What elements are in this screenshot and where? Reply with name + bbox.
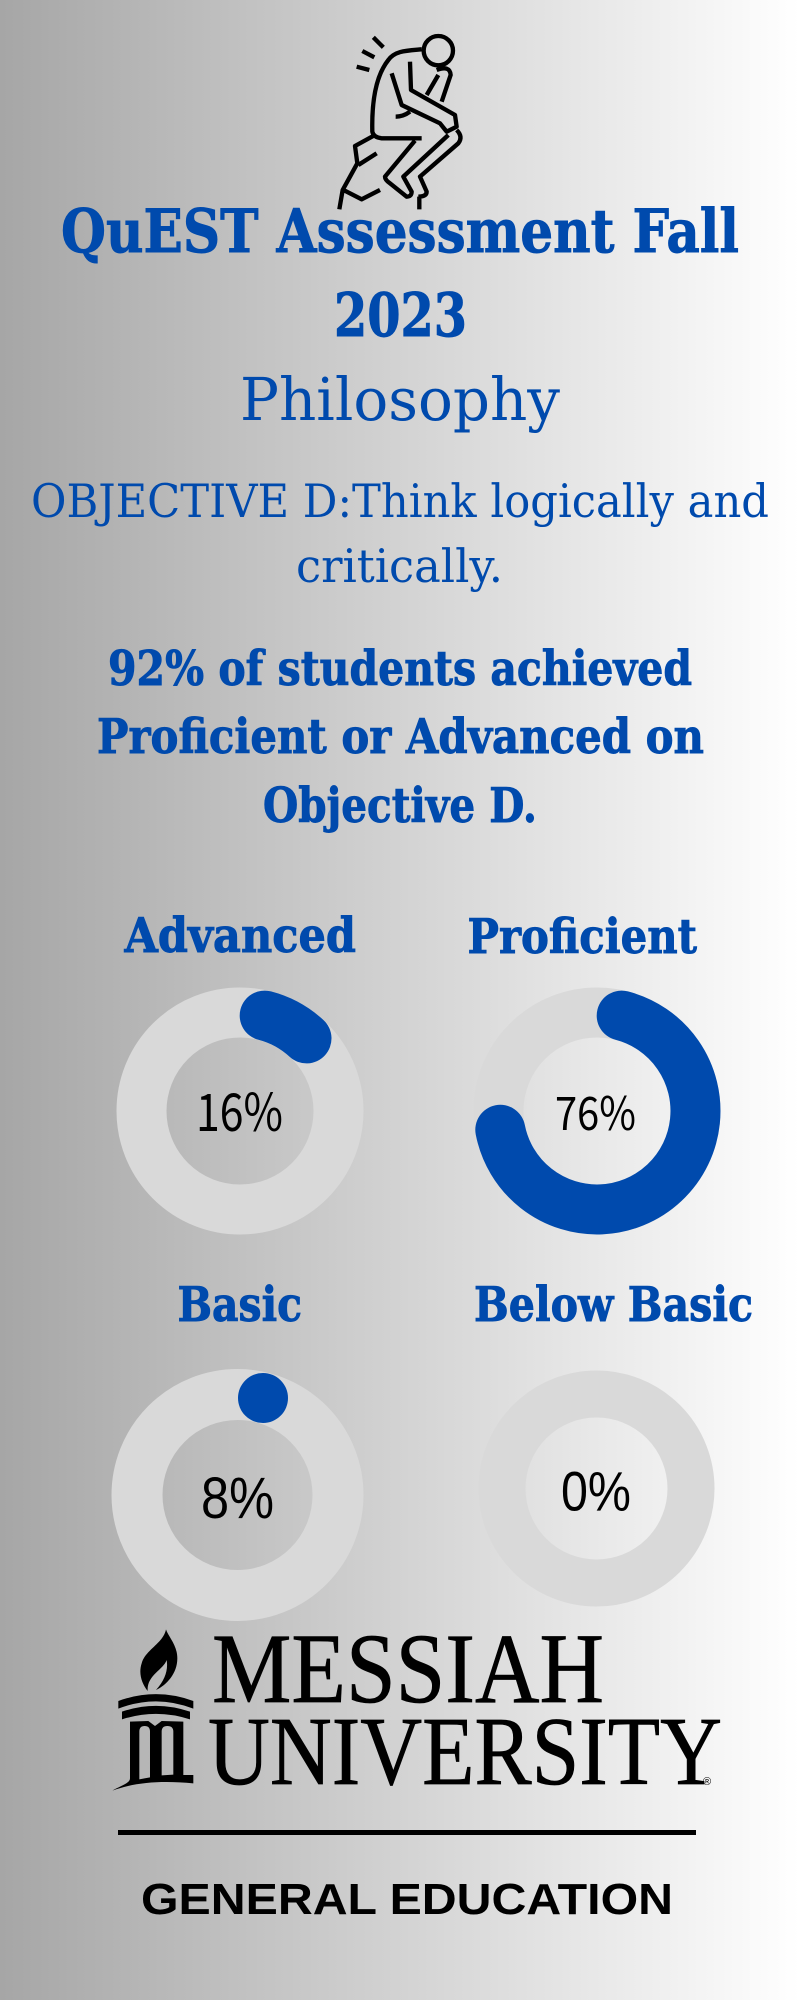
wordmark: ® [703, 1776, 711, 1788]
donut chart: Below Basic 0%: 0% [561, 1460, 631, 1522]
key finding text: Objective D. [263, 778, 537, 834]
donut chart: Basic 8%: 8% [201, 1466, 274, 1531]
wordmark [208, 1613, 722, 1805]
donut chart: Advanced 16% [142, 1012, 338, 1210]
text: General Education: GENERAL EDUCATION [141, 1875, 673, 1924]
wordmark: UNIVERSITY [208, 1698, 722, 1805]
donut chart: Advanced 16%: 16% [196, 1071, 283, 1146]
logo: Messiah University [112, 1613, 722, 1805]
title [61, 197, 739, 351]
wordmark: MESSIAH [212, 1613, 604, 1724]
objective text: OBJECTIVE D:Think logically and [31, 474, 769, 528]
subtitle: Philosophy: Philosophy [240, 365, 561, 434]
objective text: critically. [296, 539, 503, 593]
panel: Below Basic [474, 1277, 753, 1583]
donut chart: Proficient 76%: 76% [555, 1078, 636, 1144]
panel: Proficient [468, 909, 697, 1210]
donut chart: Proficient 76% [498, 1012, 696, 1210]
panel: Basic [137, 1277, 338, 1596]
panel: Advanced [124, 908, 356, 1210]
key finding text: 92% of students achieved [108, 641, 692, 697]
donut chart: Below Basic 0% [502, 1394, 691, 1583]
heading: Proficient: Proficient [468, 909, 697, 965]
icon: torch and column [112, 1629, 193, 1791]
objective text [31, 474, 769, 593]
heading: Below Basic: Below Basic [474, 1277, 753, 1333]
icon: thinker statue [339, 36, 460, 209]
donut chart: Basic 8% [137, 1373, 338, 1596]
key finding text: Proficient or Advanced on [97, 709, 704, 765]
heading: Basic: Basic [178, 1277, 302, 1333]
title: 2023 [334, 281, 467, 351]
heading: Advanced: Advanced [124, 908, 356, 964]
key finding text [97, 641, 704, 834]
